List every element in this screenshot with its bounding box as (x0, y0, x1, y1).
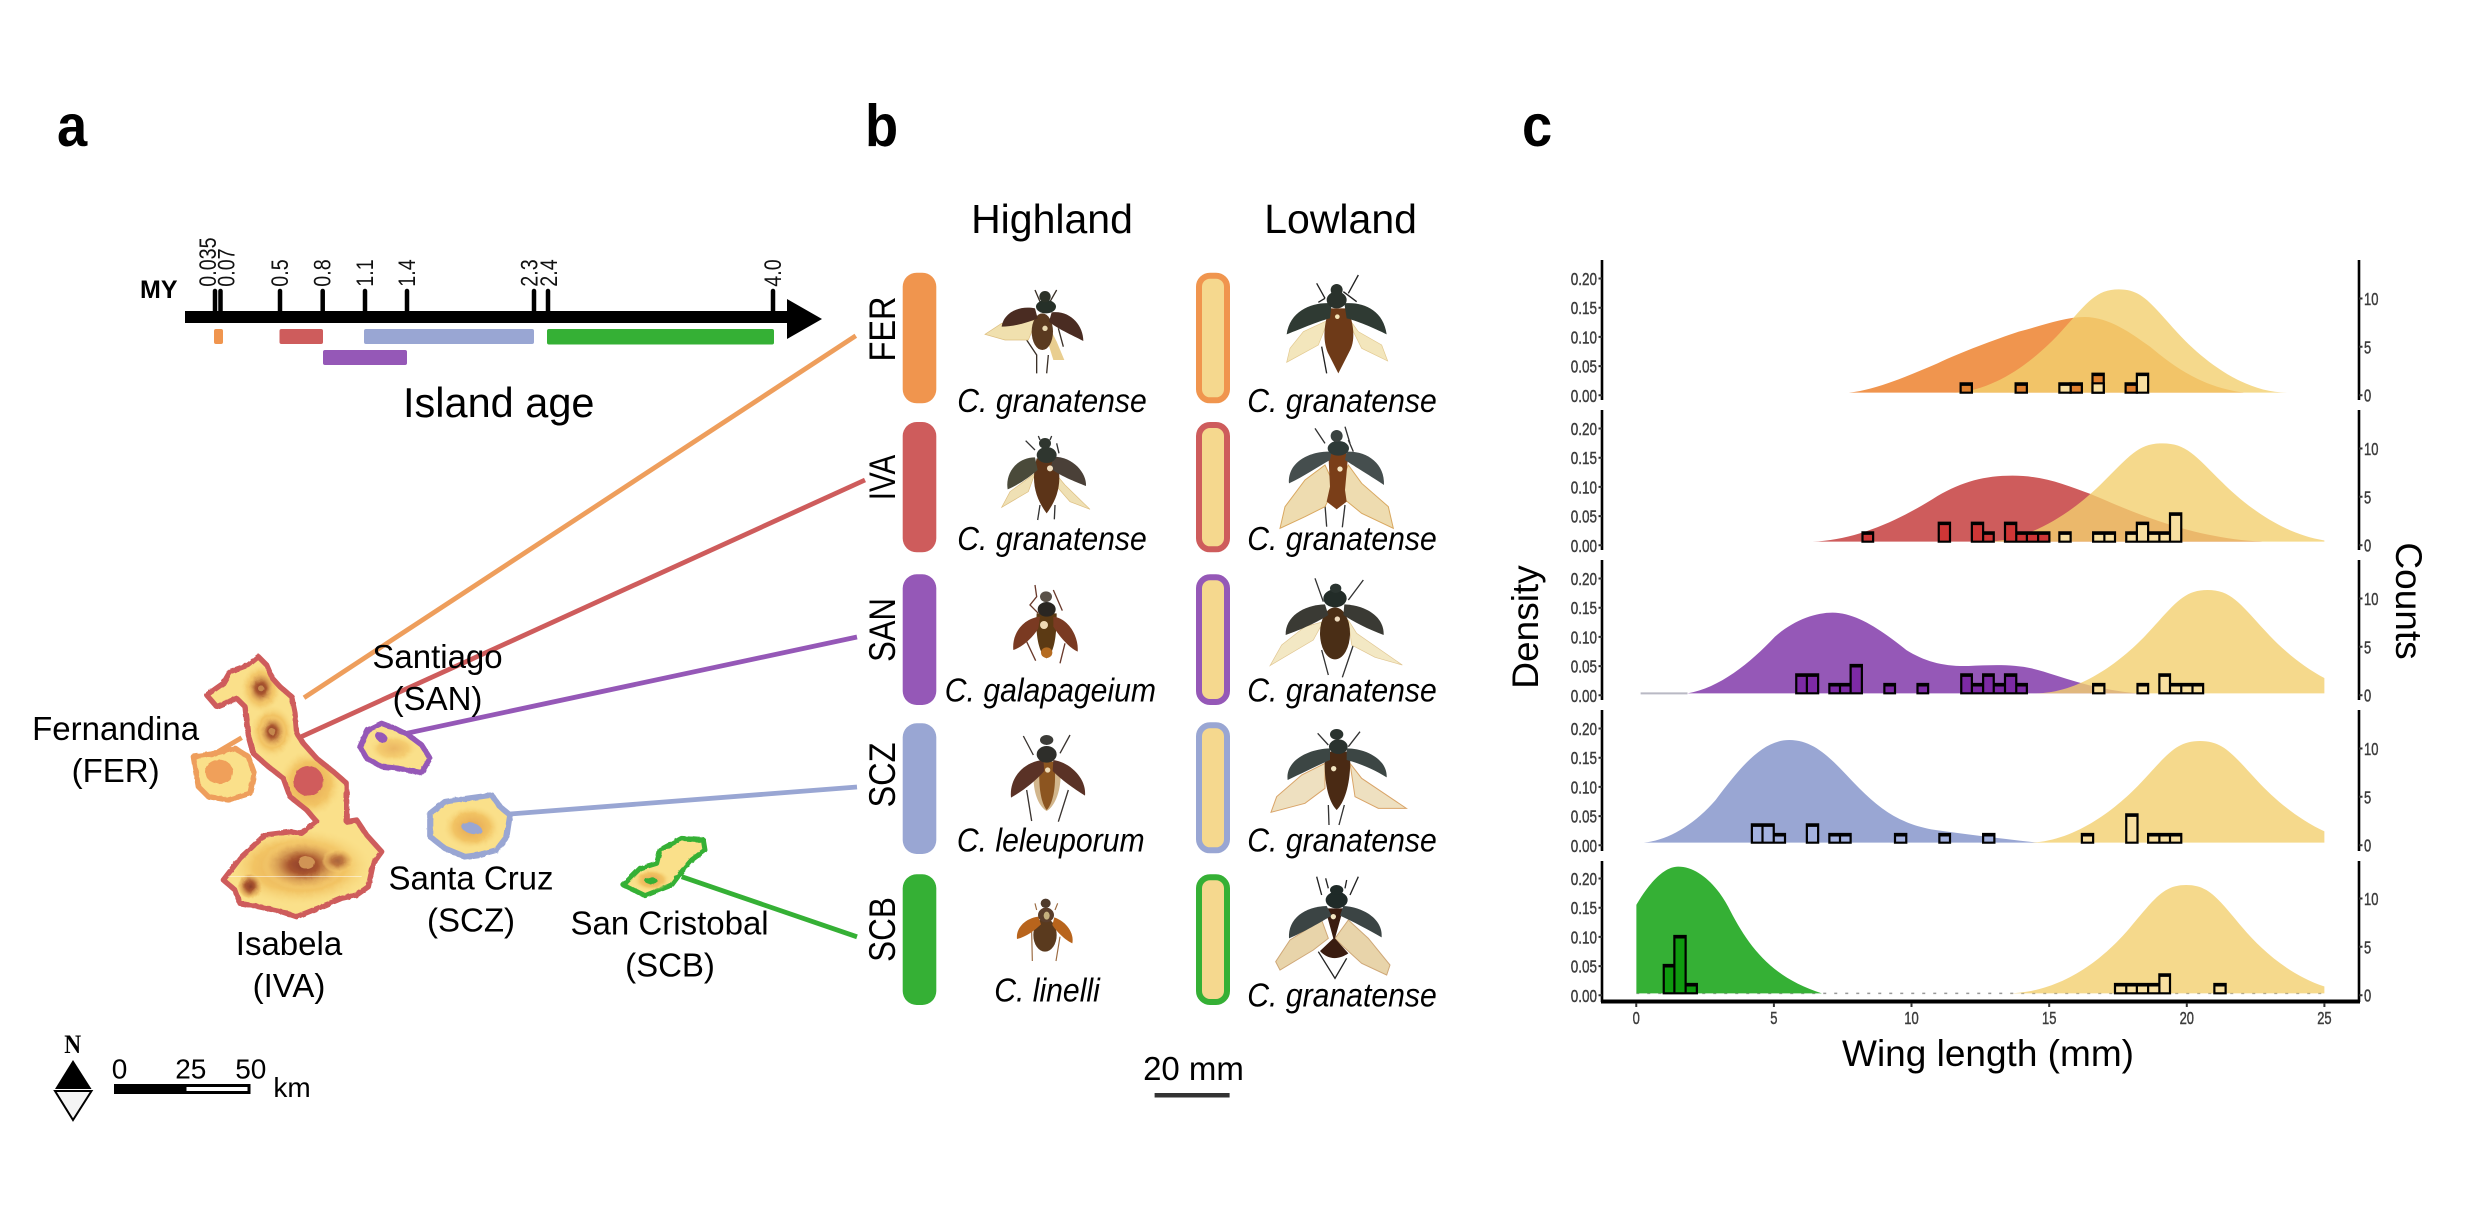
left density axes: 0.15 (1571, 899, 1597, 919)
right counts axes: 5 (2364, 488, 2371, 508)
panel label c: c (1522, 94, 1552, 160)
beetle: SAN lowland (1270, 578, 1402, 677)
north arrow: N (64, 1031, 81, 1059)
left density axes: 0.05 (1571, 658, 1597, 677)
left density axes: 0.10 (1571, 929, 1597, 948)
facet: SCZ densities and counts (1644, 740, 2372, 843)
right counts axes: 0 (2364, 687, 2371, 706)
MY unit label: MY (140, 276, 178, 304)
right counts axes: 5 (2364, 788, 2371, 808)
tick labels: 2.3 (516, 259, 543, 287)
panel c: density facets (1505, 260, 2429, 1074)
left density axes: 0.15 (1571, 599, 1597, 619)
tick labels: 1.1 (351, 259, 378, 287)
left density axes: 0.00 (1571, 987, 1597, 1006)
row: FER: FER (862, 296, 903, 362)
island name labels (32, 638, 769, 1004)
island name labels: Isabela (236, 925, 343, 962)
left density axes: 0.10 (1571, 329, 1597, 348)
row: FER: C. granatense (957, 382, 1147, 419)
island age range bars (214, 329, 774, 365)
north arrow (55, 1031, 92, 1120)
right counts axes: 10 (2364, 590, 2379, 610)
island name labels: Fernandina (32, 710, 200, 747)
facet: SCB densities and counts (1636, 867, 2366, 993)
panel b headings: Lowland (1264, 196, 1417, 242)
leader lines from map to rows (218, 336, 865, 937)
beetle: FER lowland (1287, 275, 1388, 373)
left density axes: 0.05 (1571, 958, 1597, 977)
row: SCB (862, 874, 1437, 1014)
tick labels: 0.5 (266, 259, 293, 287)
beetle: SCZ highland (1011, 735, 1085, 822)
row: IVA: C. granatense (957, 520, 1147, 557)
island name labels: (SCZ) (427, 902, 515, 939)
wing length x axis: 25 (2317, 1009, 2332, 1029)
right counts axes: 5 (2364, 338, 2371, 358)
beetle: SCZ lowland (1271, 729, 1406, 825)
left density axes: 0.00 (1571, 837, 1597, 856)
right counts axes: 5 (2364, 938, 2371, 958)
panel label a: a (57, 94, 88, 160)
island name labels: (FER) (72, 752, 160, 789)
left density axes: 0.15 (1571, 749, 1597, 769)
facet: FER densities and counts (1849, 289, 2288, 393)
left density axes: 0.20 (1571, 720, 1597, 740)
row: IVA: C. granatense (1247, 520, 1437, 557)
tick labels (194, 237, 786, 287)
island: San Cristobal (623, 838, 705, 896)
map scale bar: 50 (235, 1054, 266, 1085)
facet: IVA densities and counts (1812, 443, 2341, 542)
tick labels: 0.035 (194, 237, 221, 287)
row: FER (862, 273, 1437, 419)
beetle: IVA highland (1002, 436, 1090, 520)
row: IVA: IVA (863, 454, 904, 500)
left density axes: 0.00 (1571, 687, 1597, 706)
timeline caption: Island age (403, 379, 595, 426)
row: SCZ: C. leleuporum (957, 821, 1145, 859)
right counts axes: 0 (2364, 387, 2371, 406)
wing length x axis (1601, 1002, 2360, 1074)
left density axes: 0.20 (1571, 420, 1597, 440)
left density axes: 0.10 (1571, 629, 1597, 648)
right counts axes (2359, 260, 2379, 1006)
facet: SAN densities and counts (1641, 590, 2380, 693)
beetle: FER highland (985, 290, 1083, 373)
panel a: island age timeline (140, 237, 822, 426)
left density axes (1571, 260, 1602, 1006)
left density axes: 0.20 (1571, 270, 1597, 290)
tick labels: 2.4 (535, 259, 562, 287)
left density axes: 0.15 (1571, 299, 1597, 319)
timeline arrow (185, 299, 822, 339)
map scale bar: km (273, 1072, 311, 1103)
right counts axes: 0 (2364, 837, 2371, 856)
wing length x axis: 20 (2180, 1009, 2194, 1029)
left density axes: 0.20 (1571, 570, 1597, 590)
right counts axes: 5 (2364, 638, 2371, 658)
island: Fernandina (193, 748, 254, 800)
wing length x axis: Wing length (mm) (1842, 1033, 2134, 1074)
left density axes: 0.15 (1571, 449, 1597, 469)
row: SCZ: SCZ (862, 742, 903, 808)
tick labels: 4.0 (759, 259, 786, 287)
left density axes: 0.20 (1571, 870, 1597, 890)
tick labels: 0.8 (309, 259, 336, 287)
map scale bar: 0 (112, 1054, 127, 1085)
right counts axes: 10 (2364, 440, 2379, 460)
island name labels: San Cristobal (571, 904, 769, 941)
row: SCB: C. granatense (1247, 976, 1437, 1014)
row: SCZ: C. granatense (1247, 821, 1437, 859)
island: Santa Cruz (430, 795, 510, 857)
left density axes: 0.00 (1571, 387, 1597, 406)
row: SAN: SAN (862, 598, 903, 662)
panel b headings (971, 196, 1417, 242)
beetle: SCB lowland (1276, 877, 1390, 978)
right counts axes: 10 (2364, 740, 2379, 760)
timeline ticks (215, 291, 773, 311)
island name labels: (SCB) (625, 946, 715, 983)
left density axes: 0.10 (1571, 479, 1597, 498)
beetle scale bar: 20 mm (1143, 1050, 1244, 1087)
row: FER: C. granatense (1247, 382, 1437, 419)
right counts axes: 0 (2364, 987, 2371, 1006)
beetle: SAN highland (1013, 585, 1078, 663)
counts axis title: Counts (2388, 542, 2429, 660)
contour seam lines (228, 876, 362, 878)
island: Isabela (207, 657, 382, 917)
wing length x axis: 15 (2042, 1009, 2057, 1029)
wing length x axis: 0 (1633, 1009, 1640, 1029)
tick labels: 1.4 (393, 259, 420, 287)
row: SCZ (862, 723, 1437, 859)
right counts axes: 10 (2364, 890, 2379, 910)
wing length x axis: 5 (1770, 1009, 1778, 1029)
island: Santiago (360, 723, 430, 773)
beetle: SCB highland (1017, 899, 1073, 961)
left density axes: 0.00 (1571, 537, 1597, 556)
left density axes: 0.10 (1571, 779, 1597, 798)
panel b headings: Highland (971, 196, 1133, 242)
left density axes: 0.05 (1571, 508, 1597, 527)
left density axes: 0.05 (1571, 358, 1597, 377)
right counts axes: 10 (2364, 290, 2379, 310)
beetle: IVA lowland (1280, 427, 1393, 528)
row: SAN (862, 574, 1437, 709)
island name labels: (SAN) (393, 680, 482, 717)
row: SAN: C. granatense (1247, 671, 1437, 709)
island name labels: Santa Cruz (388, 860, 554, 896)
row: SCB: C. linelli (994, 971, 1101, 1009)
left density axes: 0.05 (1571, 808, 1597, 827)
island name labels: Santiago (372, 638, 503, 675)
map scale bar: 25 (175, 1054, 206, 1085)
panel label b: b (865, 94, 898, 160)
right counts axes: 0 (2364, 537, 2371, 556)
tick labels: 0.07 (213, 248, 240, 287)
density axis title: Density (1505, 565, 1546, 689)
island name labels: (IVA) (253, 967, 325, 1004)
row: SCB: SCB (862, 897, 903, 962)
wing length x axis: 10 (1904, 1009, 1919, 1029)
map of the Galapagos islands (193, 657, 705, 917)
row: IVA (863, 422, 1437, 557)
map scale bar (112, 1054, 311, 1103)
row: SAN: C. galapageium (945, 671, 1156, 709)
